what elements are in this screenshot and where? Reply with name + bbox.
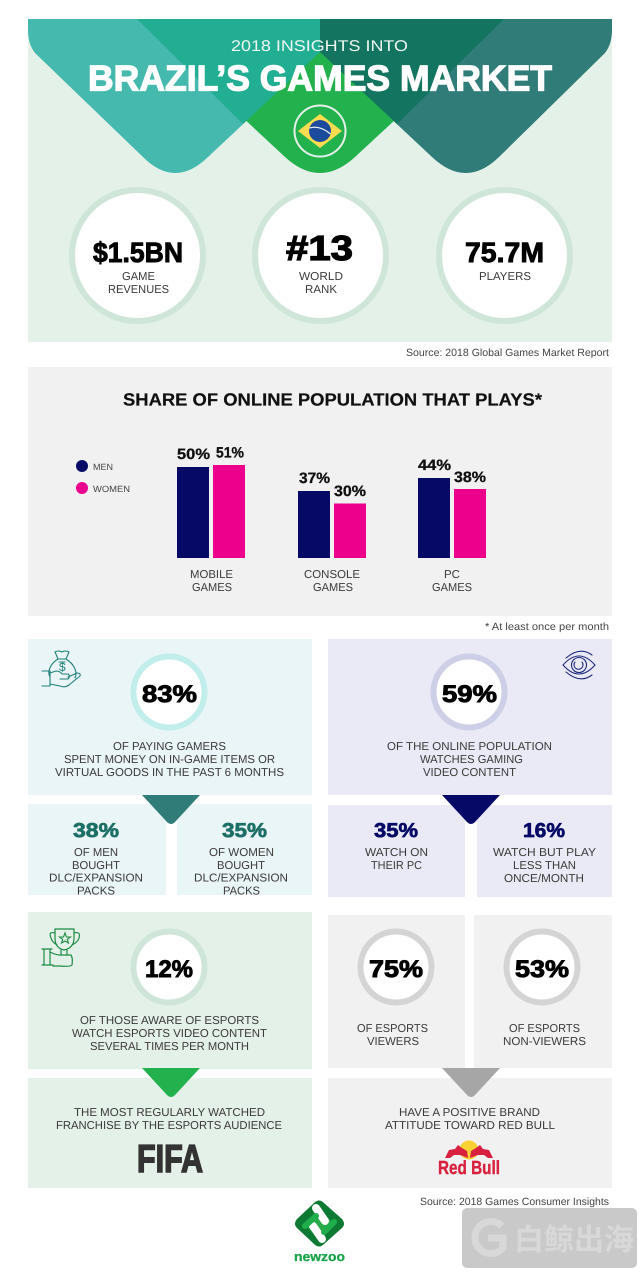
panel: men DLC purchases: OF MEN — [74, 847, 118, 859]
icon: trophy in hand — [42, 929, 79, 966]
description: video viewers — [387, 741, 552, 779]
bar group: mobile games: 51% — [216, 444, 244, 462]
panel: watch but rarely play: WATCH BUT PLAY — [493, 847, 596, 859]
panel: watch but rarely play: LESS THAN — [513, 860, 576, 872]
panel: esports viewers — [328, 915, 465, 1068]
description: esports awareness: SEVERAL TIMES PER MONTH — [90, 1041, 249, 1053]
bar group: console games: GAMES — [313, 582, 353, 594]
panel: men DLC purchases: DLC/EXPANSION — [49, 872, 143, 884]
bar group: mobile games: 50% — [177, 446, 210, 463]
panel: watch on PC: WATCH ON — [365, 847, 428, 859]
panel: esports non-viewers: NON-VIEWERS — [503, 1036, 586, 1048]
panel: women DLC purchases: 35% — [222, 820, 267, 842]
bar group: pc games — [418, 457, 486, 594]
panel: men DLC purchases: BOUGHT — [72, 860, 120, 872]
panel: most watched franchise: THE MOST REGULARLY WATCHED — [74, 1107, 265, 1119]
title: BRAZIL’S GAMES MARKET — [88, 58, 552, 98]
stat: game revenues — [72, 190, 203, 321]
panel: men DLC purchases — [28, 804, 166, 898]
arrow: video viewers — [442, 795, 500, 824]
legend: WOMEN — [93, 484, 130, 494]
description: esports awareness: WATCH ESPORTS VIDEO CONTENT — [72, 1028, 267, 1040]
source note: consumer insights: Source: 2018 Games Consumer Insights — [420, 1196, 609, 1208]
subtitle: 2018 INSIGHTS INTO — [231, 38, 408, 55]
panel: women DLC purchases: PACKS — [223, 886, 260, 898]
panel: watch but rarely play — [477, 805, 612, 897]
stat: world rank: RANK — [305, 284, 337, 296]
stat: world rank: WORLD — [299, 271, 343, 283]
stat: game revenues: $1.5BN — [93, 237, 183, 268]
description: esports awareness: OF THOSE AWARE OF ESPORTS — [80, 1015, 259, 1027]
bar group: pc games: PC — [444, 569, 460, 581]
bar group: console games: CONSOLE — [304, 569, 360, 581]
panel: women DLC purchases: BOUGHT — [217, 860, 265, 872]
icon detail: star — [60, 933, 70, 943]
panel: women DLC purchases: OF WOMEN — [209, 847, 274, 859]
arrow: paying gamers — [142, 795, 200, 824]
stat: players: PLAYERS — [479, 271, 531, 283]
stat ring: 83%: 83% — [142, 681, 197, 708]
logo: FIFA: FIFA — [137, 1138, 203, 1181]
icon: Brazil flag — [294, 106, 346, 156]
panel: esports non-viewers — [474, 915, 612, 1068]
panel: esports viewers: 75% — [369, 956, 423, 983]
arrow: brand attitude — [442, 1068, 500, 1097]
panel: watch on PC — [328, 805, 465, 897]
bar group: mobile games — [177, 444, 245, 594]
description: paying gamers: SPENT MONEY ON IN-GAME ITEMS OR — [64, 754, 275, 766]
description: video viewers: WATCHES GAMING — [420, 754, 523, 766]
panel: women DLC purchases: DLC/EXPANSION — [194, 872, 288, 884]
logo: Red Bull: Red Bull — [438, 1158, 500, 1179]
panel: esports viewers: OF ESPORTS — [357, 1023, 428, 1035]
stat: players — [439, 190, 570, 321]
panel: watch on PC: 35% — [374, 820, 418, 842]
bar group: pc games: 38% — [454, 469, 486, 486]
stat: game revenues: REVENUES — [108, 284, 169, 296]
arrow: esports awareness — [142, 1068, 200, 1097]
panel: esports viewers: VIEWERS — [367, 1036, 419, 1048]
chart heading: SHARE OF ONLINE POPULATION THAT PLAYS* — [123, 390, 542, 410]
panel: share of online population chart — [28, 367, 612, 616]
panel: watch on PC: THEIR PC — [371, 860, 422, 872]
source note: market report: Source: 2018 Global Games Market Report — [406, 347, 609, 359]
panel: brand attitude: ATTITUDE TOWARD RED BULL — [385, 1120, 556, 1132]
stat: players: 75.7M — [465, 237, 544, 268]
bar group: console games — [298, 470, 366, 594]
stat ring: 59% — [434, 656, 504, 728]
stat ring: 12% — [134, 932, 204, 1002]
stat: world rank — [255, 190, 386, 321]
description: video viewers: VIDEO CONTENT — [423, 767, 516, 779]
icon detail: dollar sign: $ — [59, 660, 66, 674]
bar group: pc games: GAMES — [432, 582, 472, 594]
bar group: mobile games: GAMES — [192, 582, 232, 594]
bar group: console games: 37% — [299, 470, 330, 487]
header chevrons — [28, 19, 612, 173]
bar group: mobile games: MOBILE — [190, 569, 233, 581]
watermark: 白鲸出海 — [514, 1224, 634, 1257]
description: esports awareness — [72, 1015, 267, 1053]
legend: MEN — [93, 462, 113, 472]
panel: watch but rarely play: ONCE/MONTH — [504, 873, 584, 885]
panel: esports non-viewers: 53% — [515, 956, 569, 983]
bar group: console games: 30% — [334, 483, 366, 500]
panel: esports non-viewers: OF ESPORTS — [509, 1023, 580, 1035]
logo: newzoo: newzoo — [294, 1249, 345, 1264]
panel: gaming video viewers — [328, 639, 612, 795]
panel: brand attitude — [328, 1078, 612, 1188]
stat: world rank: #13 — [286, 229, 353, 268]
stat ring: 12%: 12% — [145, 956, 193, 983]
stat ring: 83% — [134, 656, 204, 728]
panel: esports awareness — [28, 912, 312, 1069]
footnote: * At least once per month — [485, 621, 609, 633]
icon: money bag on hand — [42, 651, 80, 687]
panel: header and key stats — [28, 19, 612, 342]
panel: brand attitude: HAVE A POSITIVE BRAND — [399, 1107, 540, 1119]
watermark — [462, 1208, 637, 1268]
panel: most watched franchise — [28, 1078, 312, 1188]
stat: game revenues: GAME — [122, 271, 155, 283]
description: paying gamers: OF PAYING GAMERS — [113, 741, 226, 753]
icon: eye — [563, 651, 595, 679]
panel: men DLC purchases: PACKS — [77, 886, 115, 898]
description: video viewers: OF THE ONLINE POPULATION — [387, 741, 552, 753]
panel: most watched franchise: FRANCHISE BY THE ESPORTS AUDIENCE — [56, 1120, 282, 1132]
logo: Red Bull — [438, 1140, 500, 1179]
bar group: pc games: 44% — [418, 457, 451, 474]
description: paying gamers — [55, 741, 284, 779]
legend — [76, 460, 130, 494]
description: paying gamers: VIRTUAL GOODS IN THE PAST 6 MONTHS — [55, 767, 284, 779]
panel: women DLC purchases — [177, 804, 312, 898]
stat ring: 59%: 59% — [442, 681, 497, 708]
logo: newzoo — [294, 1200, 345, 1264]
panel: men DLC purchases: 38% — [73, 820, 119, 842]
panel: paying gamers — [28, 639, 312, 795]
panel: watch but rarely play: 16% — [523, 820, 565, 842]
